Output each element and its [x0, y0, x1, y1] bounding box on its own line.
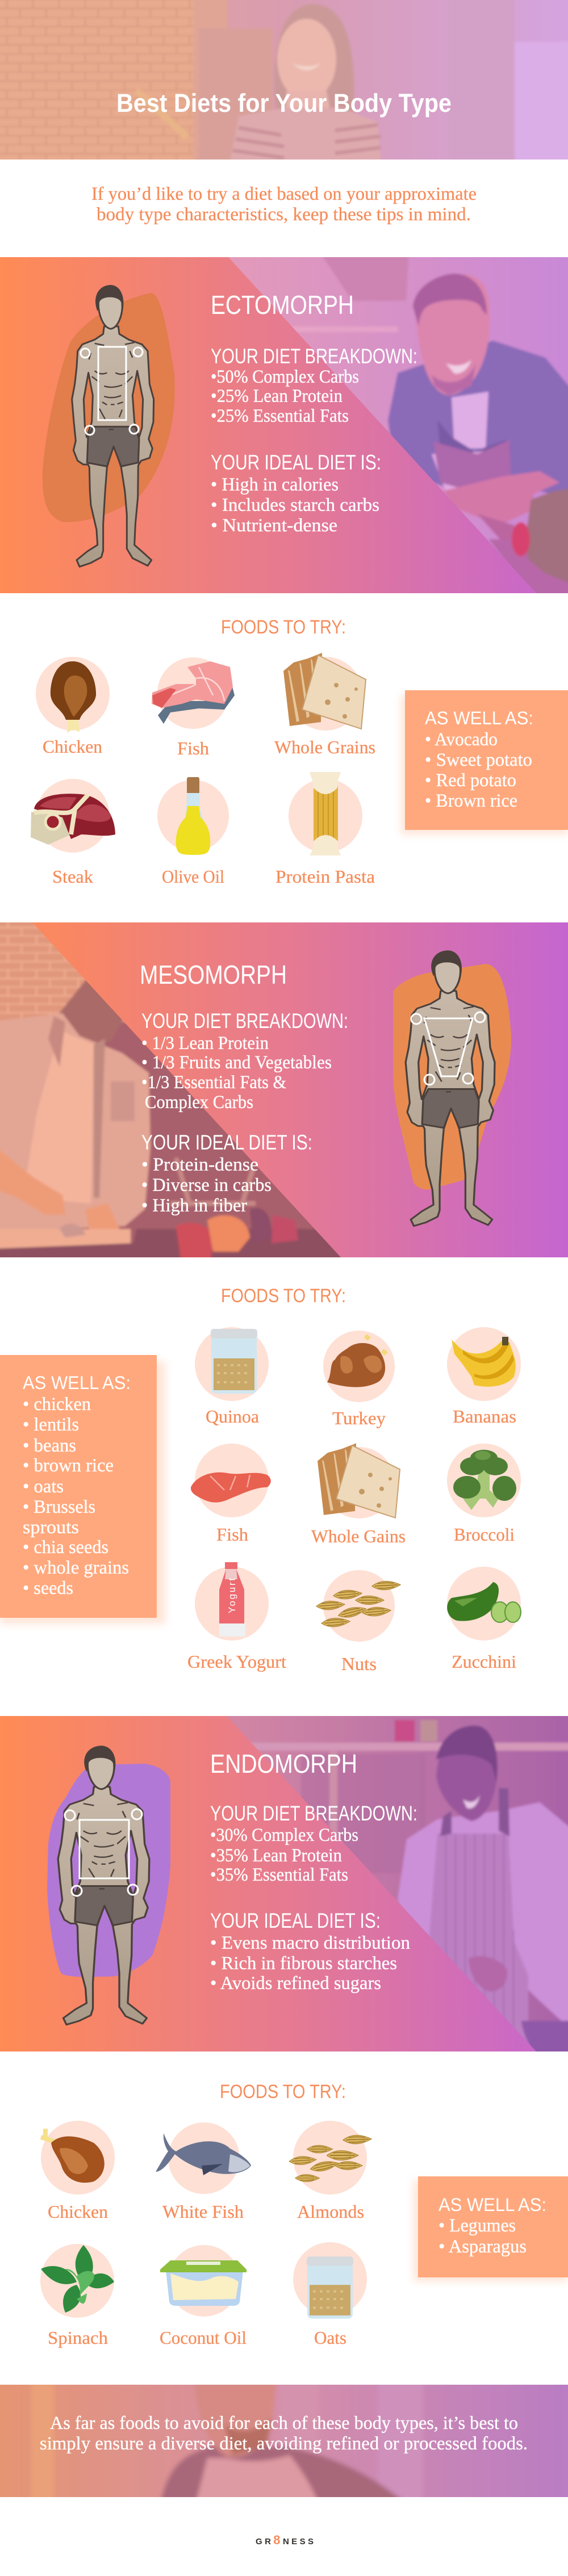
intro text — [91, 184, 477, 225]
ideal diet: YOUR IDEAL DIET IS: — [210, 1909, 381, 1932]
panel: mesomorph — [0, 914, 568, 1266]
food: coconut oil — [160, 2245, 247, 2348]
ideal diet: • Avoids refined sugars — [210, 1973, 381, 1994]
food: oats: Oats — [314, 2327, 346, 2348]
diet breakdown: • 1/3 Fruits and Vegetables — [141, 1052, 332, 1073]
food: whole grains: Whole Grains — [274, 737, 375, 757]
diet breakdown: • 1/3 Lean Protein — [141, 1033, 269, 1054]
callout: as well as (mesomorph): • beans — [23, 1436, 76, 1456]
closing banner — [0, 2385, 568, 2497]
callout: as well as (mesomorph) — [0, 1355, 165, 1624]
diet breakdown — [210, 1802, 417, 1885]
body blob — [393, 964, 511, 1190]
ideal diet: • Rich in fibrous starches — [210, 1953, 397, 1974]
food: whole gains: Whole Gains — [311, 1526, 406, 1546]
closing text: As far as foods to avoid for each of these body types, it’s best to — [50, 2413, 518, 2434]
food: turkey — [323, 1331, 395, 1428]
diet breakdown: •1/3 Essential Fats & — [141, 1072, 286, 1093]
figure: mesomorph body — [406, 950, 495, 1226]
closing text — [40, 2413, 528, 2454]
food: greek yogurt: Greek Yogurt — [187, 1651, 286, 1672]
body blob — [47, 1764, 170, 1977]
food: bananas: Bananas — [453, 1406, 516, 1427]
food: steak — [31, 779, 115, 887]
callout: as well as (mesomorph): sprouts — [23, 1517, 79, 1538]
callout: as well as (mesomorph): • oats — [23, 1476, 64, 1497]
photo: man in striped apron — [216, 1709, 568, 2061]
food: white fish — [156, 2122, 251, 2222]
intro text: If you’d like to try a diet based on your approximate — [91, 184, 477, 204]
header photo background — [0, 0, 568, 173]
foods heading: endomorph: FOODS TO TRY: — [220, 2081, 346, 2103]
food: bananas — [447, 1327, 521, 1427]
intro text: body type characteristics, keep these tips in mind. — [97, 204, 471, 225]
diet breakdown — [141, 1009, 348, 1113]
photo: man chopping vegetables — [0, 914, 352, 1266]
ideal diet: • Diverse in carbs — [141, 1175, 272, 1195]
food: olive oil — [157, 777, 229, 887]
figure: endomorph body — [58, 1746, 149, 2025]
food: oats — [293, 2242, 367, 2348]
callout: as well as (ectomorph): • Sweet potato — [425, 750, 532, 770]
food: quinoa: Quinoa — [206, 1406, 259, 1427]
diet breakdown: •35% Lean Protein — [210, 1845, 342, 1866]
food: olive oil: Olive Oil — [162, 866, 224, 887]
ideal diet: • Includes starch carbs — [211, 495, 379, 515]
food: almonds: Almonds — [297, 2201, 364, 2222]
callout: as well as (mesomorph): • seeds — [23, 1578, 73, 1599]
ideal diet: YOUR IDEAL DIET IS: — [141, 1131, 312, 1154]
food: spinach: Spinach — [48, 2327, 108, 2348]
mesomorph heading: MESOMORPH — [140, 960, 287, 989]
callout: as well as (mesomorph): AS WELL AS: — [23, 1373, 131, 1393]
ideal diet: • Protein-dense — [141, 1155, 258, 1175]
body blob — [43, 293, 175, 522]
diet breakdown: •30% Complex Carbs — [210, 1825, 358, 1845]
diet breakdown: •25% Essential Fats — [211, 406, 349, 426]
callout: as well as (mesomorph): • chia seeds — [23, 1537, 108, 1558]
food: broccoli: Broccoli — [454, 1524, 515, 1545]
diet breakdown: YOUR DIET BREAKDOWN: — [210, 1802, 417, 1825]
ideal diet: • High in fiber — [141, 1195, 247, 1216]
ideal diet: • Evens macro distribution — [210, 1933, 410, 1953]
closing text: simply ensure a diverse diet, avoiding refined or processed foods. — [40, 2434, 528, 2454]
panel: ectomorph — [0, 250, 568, 602]
callout: as well as (ectomorph): AS WELL AS: — [425, 708, 533, 728]
food: chicken: Chicken — [43, 736, 102, 757]
food: almonds — [289, 2121, 371, 2222]
diet breakdown: •50% Complex Carbs — [211, 367, 359, 387]
callout: as well as (endomorph): • Asparagus — [438, 2237, 527, 2257]
header banner — [0, 0, 568, 173]
food: zucchini — [447, 1567, 521, 1672]
callout: as well as (endomorph): • Legumes — [438, 2216, 516, 2236]
callout: as well as (mesomorph): • lentils — [23, 1415, 79, 1435]
food: chicken leg: Chicken — [48, 2201, 108, 2222]
food: nuts: Nuts — [341, 1654, 377, 1674]
diet breakdown — [211, 345, 417, 426]
food: protein pasta — [275, 772, 375, 887]
food: whole gains — [311, 1443, 406, 1546]
ideal diet: • High in calories — [211, 475, 339, 495]
ideal diet: • Nutrient-dense — [211, 515, 337, 536]
diet breakdown: Complex Carbs — [145, 1092, 253, 1113]
food: coconut oil: Coconut Oil — [160, 2327, 247, 2348]
diet breakdown: •25% Lean Protein — [211, 386, 343, 406]
banner photo background — [0, 2385, 568, 2497]
food: fish — [152, 657, 235, 758]
diet breakdown: YOUR DIET BREAKDOWN: — [211, 345, 417, 368]
callout: as well as (ectomorph): • Brown rice — [425, 791, 517, 811]
food: protein pasta: Protein Pasta — [275, 866, 375, 887]
callout: as well as (endomorph): AS WELL AS: — [438, 2195, 546, 2215]
food: turkey: Turkey — [332, 1408, 386, 1428]
callout: as well as (ectomorph): • Avocado — [425, 729, 498, 750]
ideal diet — [211, 451, 381, 536]
callout: as well as (endomorph) — [414, 2176, 568, 2281]
ectomorph heading: ECTOMORPH — [211, 290, 354, 320]
food: fish fillet: Fish — [216, 1524, 248, 1545]
panel: endomorph — [0, 1709, 568, 2061]
diet breakdown: •35% Essential Fats — [210, 1865, 348, 1885]
ideal diet: YOUR IDEAL DIET IS: — [211, 451, 381, 474]
photo: smiling man in apron — [216, 250, 568, 602]
food: nuts — [316, 1570, 400, 1674]
food: fish fillet — [191, 1444, 271, 1545]
endomorph heading: ENDOMORPH — [210, 1749, 357, 1778]
diet breakdown: YOUR DIET BREAKDOWN: — [141, 1009, 348, 1033]
food: quinoa — [195, 1327, 269, 1427]
figure: ectomorph body — [72, 285, 154, 567]
food: whole grains — [274, 653, 375, 757]
food: white fish: White Fish — [162, 2201, 244, 2222]
callout: as well as (ectomorph): • Red potato — [425, 770, 516, 791]
ideal diet — [141, 1131, 312, 1216]
foods heading: mesomorph: FOODS TO TRY: — [221, 1285, 346, 1307]
food: broccoli — [447, 1444, 521, 1545]
title: Best Diets for Your Body Type — [116, 89, 452, 118]
callout: as well as (mesomorph): • brown rice — [23, 1455, 114, 1476]
foods heading: ectomorph: FOODS TO TRY: — [221, 616, 346, 638]
callout: as well as (mesomorph): • whole grains — [23, 1558, 129, 1578]
food: zucchini: Zucchini — [452, 1651, 516, 1672]
callout: as well as (mesomorph): • chicken — [23, 1394, 91, 1415]
food: chicken — [36, 657, 110, 757]
food: greek yogurt — [187, 1562, 286, 1672]
food: steak: Steak — [52, 866, 93, 887]
ideal diet — [210, 1909, 410, 1994]
callout: as well as (mesomorph): • Brussels — [23, 1497, 95, 1517]
food: greek yogurt: Yogurt — [227, 1578, 237, 1613]
logo: GR8NESS: GR8 NESS — [256, 2533, 314, 2547]
food: fish: Fish — [177, 738, 209, 758]
food: chicken leg — [41, 2121, 115, 2222]
food: spinach — [40, 2244, 114, 2348]
callout: as well as (ectomorph) — [401, 690, 568, 834]
